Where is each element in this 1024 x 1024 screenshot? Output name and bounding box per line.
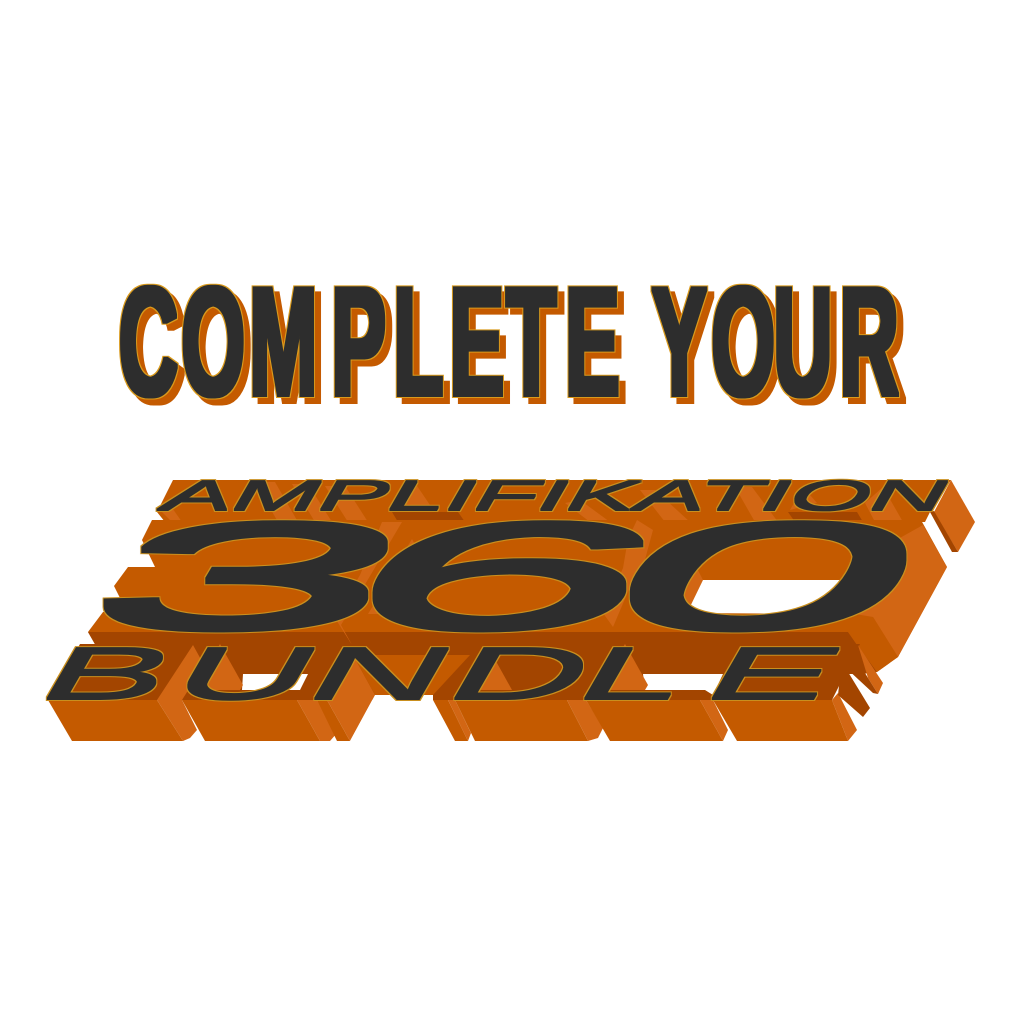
extrusion: 360 tier (88, 520, 947, 674)
extrusion: Bundle tier (48, 644, 883, 741)
wordmark: 360: 360 (51, 493, 968, 660)
extrusion: top tier (157, 480, 975, 552)
logo: extruded Amplifikation 360 Bundle (48, 480, 975, 741)
wordmark: BUNDLE: BUNDLE (23, 632, 859, 715)
title: COMPLETE YOUR (119, 256, 899, 429)
wordmark: AMPLIFIKATION: AMPLIFIKATION (152, 473, 961, 519)
